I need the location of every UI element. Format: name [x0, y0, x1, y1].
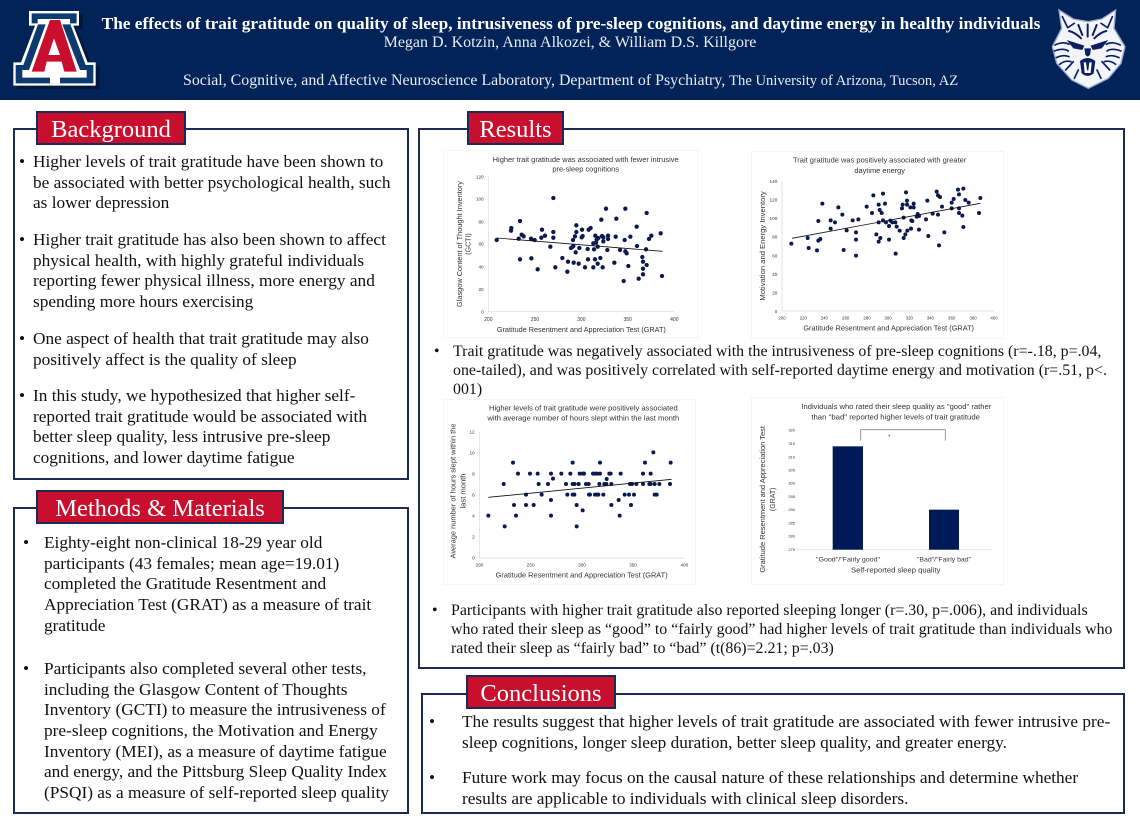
chart: gratitude vs daytime energy scatter plot: 140	[770, 179, 778, 184]
chart: gratitude vs pre-sleep cognitions scatter plot: 60	[478, 242, 484, 247]
chart: gratitude vs hours slept scatter plot: 2	[472, 535, 475, 540]
chart: sleep quality bar chart: Self-reported sleep quality	[851, 568, 941, 575]
results text: pre-sleep cognitions and energy: •	[434, 343, 440, 360]
panel: background	[13, 111, 409, 480]
chart: gratitude vs daytime energy scatter plot: 220	[800, 315, 808, 320]
background bullet list: One aspect of health that trait gratitude may also	[33, 329, 369, 348]
chart: sleep quality bar chart: 290	[788, 507, 796, 512]
background bullet list: •	[19, 152, 25, 171]
chart: gratitude vs daytime energy scatter plot: 260	[842, 315, 850, 320]
heading: methods and materials: Methods & Materials	[55, 495, 265, 522]
chart: sleep quality bar chart: 310	[788, 454, 796, 459]
chart: gratitude vs hours slept scatter plot: 0	[472, 556, 475, 561]
chart: gratitude vs hours slept scatter plot: 12	[469, 430, 475, 435]
methods bullet list: (PSQI) as a measure of self-reported sleep quality	[44, 783, 389, 802]
chart: sleep quality bar chart: 305	[788, 467, 796, 472]
chart: gratitude vs pre-sleep cognitions scatter plot: 80	[478, 219, 484, 224]
panel: conclusions	[421, 675, 1125, 814]
results text: pre-sleep cognitions and energy: Trait gratitude was negatively associated with the intrusiveness of pre-sleep cognitions (r=-.18, p=.04,	[453, 343, 1101, 360]
chart: gratitude vs daytime energy scatter plot: 240	[821, 315, 829, 320]
chart: sleep quality bar chart: "Bad"/"Fairly bad"	[917, 557, 972, 564]
chart: gratitude vs daytime energy scatter plot: 40	[772, 272, 778, 277]
methods bullet list: participants (43 females; mean age=19.01)	[44, 554, 339, 573]
chart: sleep quality bar chart: 300	[788, 481, 796, 486]
chart: gratitude vs hours slept scatter plot: Higher levels of trait gratitude were positively associated	[489, 406, 678, 413]
results text: pre-sleep cognitions and energy: 001)	[453, 381, 482, 398]
chart: gratitude vs daytime energy scatter plot: 200	[778, 315, 786, 320]
chart: sleep quality bar chart: Gratitude Resentment and Appreciation Test	[760, 426, 767, 573]
chart: gratitude vs hours slept scatter plot: Average number of hours slept within the	[451, 423, 458, 558]
methods bullet list: •	[23, 533, 29, 552]
chart: gratitude vs pre-sleep cognitions scatter plot: (GCTI)	[466, 233, 473, 255]
background bullet list: better sleep quality, less intrusive pre-sleep	[33, 427, 330, 446]
chart: gratitude vs pre-sleep cognitions scatter plot: 400	[670, 317, 679, 323]
panel: methods and materials	[13, 490, 409, 814]
chart: gratitude vs hours slept scatter plot: 4	[472, 514, 475, 519]
results text: pre-sleep cognitions and energy	[434, 343, 1107, 398]
chart: gratitude vs pre-sleep cognitions scatter plot	[443, 150, 698, 338]
chart: gratitude vs pre-sleep cognitions scatter plot: 200	[484, 317, 493, 323]
chart: sleep quality bar chart: than "bad" reported higher levels of trait gratitude	[811, 414, 980, 421]
conclusions bullet list: •	[429, 712, 435, 731]
panel: results	[418, 111, 1125, 669]
methods bullet list: gratitude	[44, 616, 105, 635]
background bullet list: In this study, we hypothesized that higher self-	[33, 386, 355, 405]
results text: sleep duration and quality: rated their sleep as “fairly bad” to “bad” (t(86)=2.21; p=.03)	[451, 640, 834, 657]
chart: gratitude vs pre-sleep cognitions scatter plot: 250	[531, 317, 539, 323]
heading: conclusions	[466, 675, 616, 709]
methods bullet list	[23, 533, 389, 802]
chart: gratitude vs pre-sleep cognitions scatter plot: 0	[481, 309, 484, 314]
chart: gratitude vs daytime energy scatter plot: 300	[884, 315, 892, 320]
background bullet list: •	[19, 386, 25, 405]
background bullet list: •	[19, 230, 25, 249]
chart: gratitude vs hours slept scatter plot	[443, 399, 696, 585]
chart: gratitude vs hours slept scatter plot: 10	[469, 451, 475, 456]
chart: gratitude vs daytime energy scatter plot: 340	[927, 315, 935, 320]
conclusions bullet list: sleep cognitions, longer sleep duration, better sleep quality, and greater energy.	[462, 732, 1007, 752]
results text: sleep duration and quality: Participants with higher trait gratitude also reported sleeping longer (r=.30, p=.006), and individuals	[451, 602, 1088, 619]
chart: gratitude vs pre-sleep cognitions scatter plot: Glasgow Content of Thought Inventory	[457, 180, 464, 307]
conclusions bullet list: results are applicable to individuals with clinical sleep disorders.	[462, 788, 908, 808]
chart: gratitude vs daytime energy scatter plot: 320	[906, 315, 914, 320]
methods bullet list: pre-sleep cognitions, the Motivation and Energy	[44, 721, 378, 740]
background bullet list: reporting fewer physical illness, more energy and	[33, 271, 375, 290]
background bullet list: Higher levels of trait gratitude have been shown to	[33, 152, 383, 171]
chart: gratitude vs daytime energy scatter plot: Motivation and Energy Inventory	[760, 191, 767, 301]
chart: sleep quality bar chart: Individuals who rated their sleep quality as "good" rather	[801, 404, 992, 411]
authors: Megan D. Kotzin, Anna Alkozei, & William D.S. Killgore	[384, 34, 756, 51]
chart: gratitude vs hours slept scatter plot: Gratitude Resentment and Appreciation Test (GRAT)	[496, 572, 668, 579]
chart: sleep quality bar chart: "Good"/"Fairly good"	[816, 557, 881, 564]
methods bullet list: Participants also completed several other tests,	[44, 659, 366, 678]
chart: gratitude vs daytime energy scatter plot: Trait gratitude was positively associated with greater	[793, 157, 967, 164]
chart: sleep quality bar chart: 285	[788, 520, 796, 525]
icon: wildcat mascot logo	[1052, 8, 1126, 90]
background bullet list: positively affect is the quality of sleep	[33, 350, 297, 369]
chart: sleep quality bar chart: 295	[788, 494, 796, 499]
chart: gratitude vs hours slept scatter plot: 350	[629, 563, 637, 568]
chart: gratitude vs daytime energy scatter plot: 0	[775, 309, 778, 314]
methods bullet list: Inventory (GCTI) to measure the intrusiveness of	[44, 700, 386, 719]
background bullet list: physical health, with highly grateful individuals	[33, 251, 364, 270]
chart: gratitude vs daytime energy scatter plot: 100	[770, 216, 778, 221]
chart: sleep quality bar chart	[751, 397, 1004, 585]
methods bullet list: •	[23, 659, 29, 678]
chart: gratitude vs daytime energy scatter plot: 400	[990, 315, 998, 320]
chart: sleep quality bar chart: *	[888, 434, 890, 440]
title: The effects of trait gratitude on quality of sleep, intrusiveness of pre-sleep cognitions, and daytime energy in healthy individuals	[102, 14, 1040, 33]
chart: gratitude vs hours slept scatter plot: 200	[475, 563, 484, 568]
background bullet list: Higher trait gratitude has also been shown to affect	[33, 230, 386, 249]
heading: background: Background	[51, 116, 171, 143]
conclusions bullet list: The results suggest that higher levels of trait gratitude are associated with fewer intrusive pre-	[462, 712, 1110, 731]
conclusions bullet list	[429, 712, 1110, 808]
chart: gratitude vs hours slept scatter plot: 300	[578, 563, 586, 568]
chart: gratitude vs pre-sleep cognitions scatter plot: 120	[476, 174, 484, 179]
results text: sleep duration and quality: •	[432, 602, 438, 619]
chart: gratitude vs hours slept scatter plot: with average number of hours slept within the last month	[486, 415, 679, 422]
heading: results: Results	[479, 116, 552, 143]
methods bullet list: and energy, and the Pittsburg Sleep Quality Index	[44, 762, 387, 781]
results text: pre-sleep cognitions and energy: one-tailed), and was positively correlated with self-reported daytime energy and motivation (r=.51, p<.	[453, 362, 1107, 379]
chart: gratitude vs hours slept scatter plot: 250	[527, 563, 535, 568]
chart: gratitude vs daytime energy scatter plot: 20	[772, 291, 778, 296]
chart: gratitude vs hours slept scatter plot: 400	[680, 563, 689, 568]
chart: gratitude vs daytime energy scatter plot: 360	[948, 315, 956, 320]
chart: sleep quality bar chart: 275	[788, 547, 796, 552]
chart: gratitude vs pre-sleep cognitions scatter plot: 40	[478, 265, 484, 270]
results text: sleep duration and quality: who rated their sleep as “good” to “fairly good” had higher levels of trait gratitude than individuals who	[451, 621, 1112, 638]
chart: sleep quality bar chart: 280	[788, 534, 796, 539]
background bullet list: be associated with better psychological health, such	[33, 173, 391, 192]
background bullet list: as lower depression	[33, 193, 169, 212]
heading: results	[467, 111, 564, 145]
chart: sleep quality bar chart: 320	[788, 428, 796, 433]
methods bullet list: Inventory (MEI), as a measure of daytime fatigue	[44, 742, 387, 761]
chart: gratitude vs pre-sleep cognitions scatter plot: 350	[623, 317, 632, 323]
background bullet list: reported trait gratitude would be associated with	[33, 407, 367, 426]
chart: gratitude vs daytime energy scatter plot: 120	[770, 198, 778, 203]
background bullet list: cognitions, and lower daytime fatigue	[33, 448, 295, 467]
chart: gratitude vs pre-sleep cognitions scatter plot: pre-sleep cognitions	[552, 167, 620, 174]
chart: gratitude vs pre-sleep cognitions scatter plot: Gratitude Resentment and Appreciation Test (GRAT)	[497, 327, 666, 334]
background bullet list	[19, 152, 391, 467]
chart: gratitude vs hours slept scatter plot: 6	[472, 493, 475, 498]
methods bullet list: including the Glasgow Content of Thoughts	[44, 680, 348, 699]
chart: gratitude vs pre-sleep cognitions scatter plot: 300	[577, 317, 586, 323]
conclusions bullet list: Future work may focus on the causal nature of these relationships and determine whether	[462, 768, 1078, 787]
chart: gratitude vs hours slept scatter plot: last month	[461, 473, 468, 508]
conclusions bullet list: •	[429, 768, 435, 787]
chart: sleep quality bar chart: (GRAT)	[770, 488, 777, 511]
chart: gratitude vs daytime energy scatter plot: daytime energy	[854, 168, 906, 175]
chart: gratitude vs daytime energy scatter plot: 80	[772, 235, 778, 240]
chart: gratitude vs daytime energy scatter plot: 280	[863, 315, 871, 320]
methods bullet list: Eighty-eight non-clinical 18-29 year old	[44, 533, 322, 552]
chart: sleep quality bar chart: 315	[788, 441, 796, 446]
chart: gratitude vs pre-sleep cognitions scatter plot: 100	[476, 197, 484, 202]
chart: gratitude vs daytime energy scatter plot: Gratitude Resentment and Appreciation Test (GRAT)	[803, 326, 974, 333]
chart: gratitude vs daytime energy scatter plot: 60	[772, 253, 778, 258]
background bullet list: spending more hours exercising	[33, 292, 253, 311]
heading: methods and materials	[36, 490, 284, 524]
chart: gratitude vs daytime energy scatter plot: 380	[969, 315, 977, 320]
results text: sleep duration and quality	[432, 602, 1112, 657]
chart: gratitude vs daytime energy scatter plot	[751, 151, 1004, 339]
heading: background	[36, 111, 186, 145]
methods bullet list: completed the Gratitude Resentment and	[44, 574, 326, 593]
affiliation: Social, Cognitive, and Affective Neuroscience Laboratory, Department of Psychiatry, The University of Arizona, Tucson, AZ	[183, 72, 958, 89]
heading: conclusions: Conclusions	[480, 680, 602, 707]
background bullet list: •	[19, 329, 25, 348]
header banner	[0, 0, 1140, 100]
icon: University of Arizona block A logo	[13, 11, 100, 89]
chart: gratitude vs pre-sleep cognitions scatter plot: Higher trait gratitude was associated with fewer intrusive	[493, 157, 679, 164]
methods bullet list: Appreciation Test (GRAT) as a measure of trait	[44, 595, 371, 614]
chart: gratitude vs pre-sleep cognitions scatter plot: 20	[478, 287, 484, 292]
chart: gratitude vs hours slept scatter plot: 8	[472, 472, 475, 477]
